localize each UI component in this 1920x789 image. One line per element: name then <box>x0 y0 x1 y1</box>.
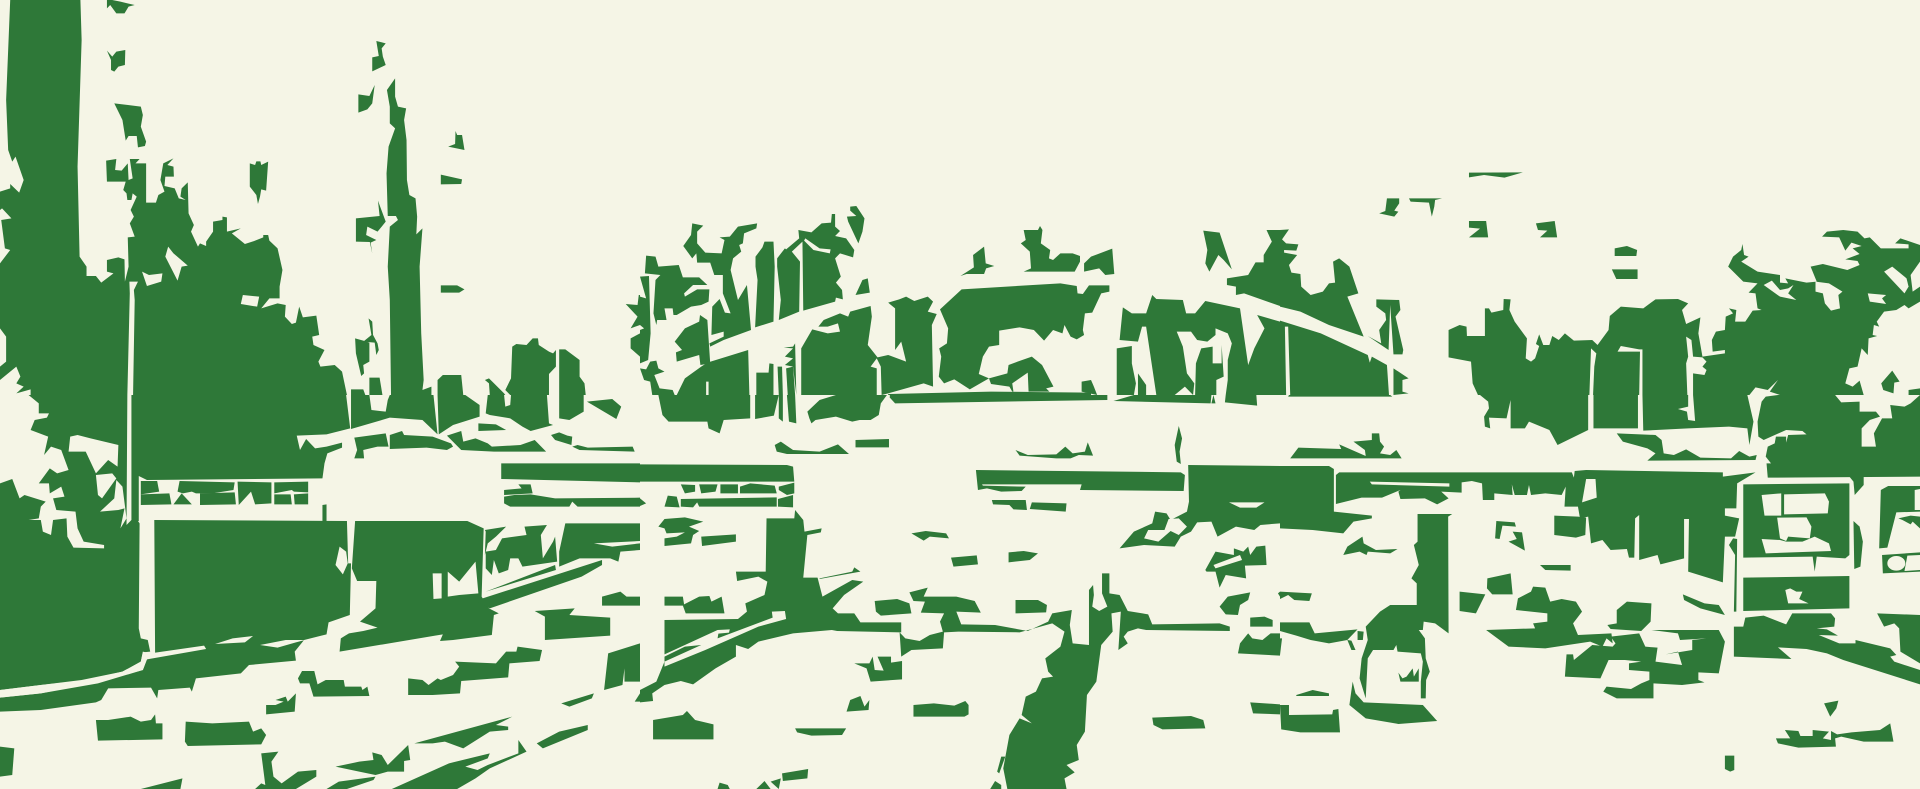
panel: lower left, building base, frieze and road <box>0 395 640 789</box>
panel: upper right, tree mass and floating fragments <box>1280 172 1920 395</box>
panel: upper centre, middle trees and facades <box>640 206 1280 395</box>
panel: lower right, shopfronts, signs, car and vehicles <box>1280 395 1920 772</box>
panel: lower centre, road spine and vehicles <box>640 395 1280 789</box>
panel: upper left, tall tree, tree mass and lamp post <box>0 0 640 395</box>
